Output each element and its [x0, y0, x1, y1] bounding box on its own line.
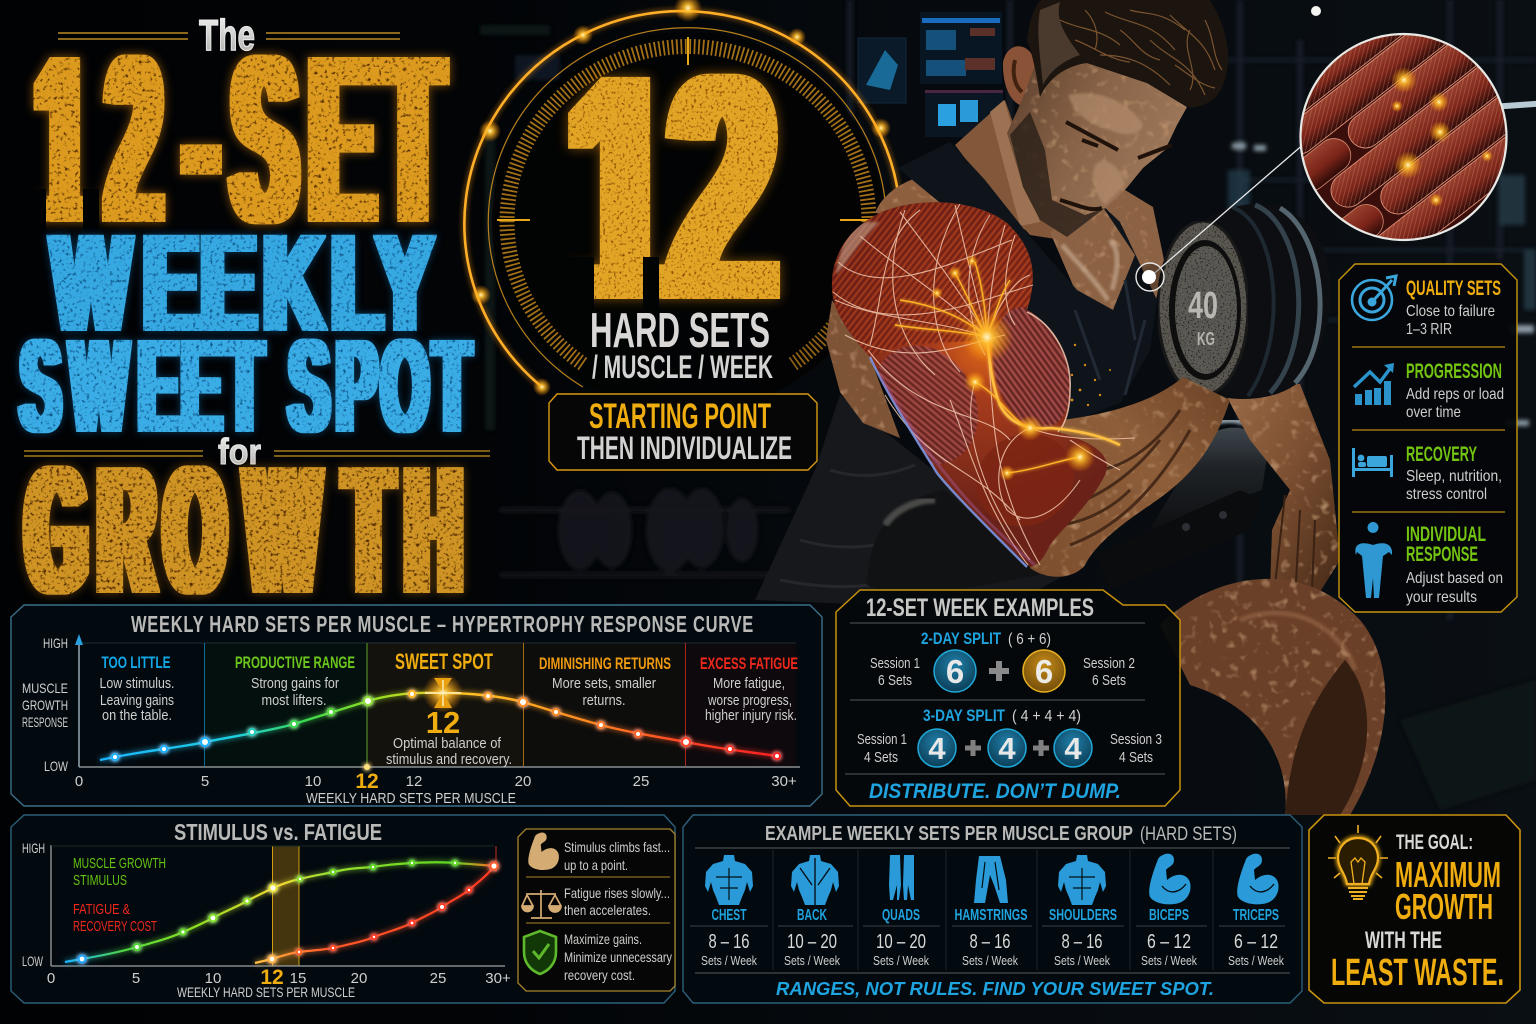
head, face and hair: [1003, 0, 1228, 237]
triceps: 6 – 12: [1234, 931, 1278, 953]
excess fatigue: worse progress,: [707, 692, 792, 709]
back: Sets / Week: [784, 953, 840, 968]
chest: 8 – 16: [708, 931, 750, 953]
icon: light bulb: [1328, 825, 1388, 899]
chest: Sets / Week: [701, 953, 757, 968]
2-day split: 6: [946, 653, 964, 690]
3-day split: 3-DAY SPLIT: [923, 706, 1005, 725]
stimulus vs fatigue chart: FATIGUE &: [73, 901, 130, 918]
starting point callout: [549, 394, 817, 470]
stimulus note: Stimulus climbs fast...: [564, 839, 670, 855]
2-day split: 2-DAY SPLIT: [921, 629, 1001, 648]
stimulus vs fatigue chart: STIMULUS: [73, 872, 127, 889]
starting point callout: THEN INDIVIDUALIZE: [577, 430, 792, 466]
individual response: INDIVIDUAL: [1406, 523, 1486, 546]
starting point callout: STARTING POINT: [589, 397, 771, 436]
productive range: most lifters.: [262, 692, 326, 709]
quads: [873, 855, 929, 968]
sweet spot: 12: [426, 705, 460, 740]
too little: TOO LITTLE: [102, 653, 170, 672]
shoulders: [1049, 855, 1117, 968]
individual response: RESPONSE: [1406, 543, 1478, 566]
3-day split: 4 Sets: [864, 749, 898, 766]
biceps: 6 – 12: [1147, 931, 1191, 953]
3-day split: [857, 706, 1162, 767]
panel: hypertrophy response curve: [11, 605, 822, 807]
biceps: BICEPS: [1149, 907, 1189, 924]
sweet spot: Optimal balance of: [393, 735, 502, 752]
back: [784, 855, 840, 968]
recovery: Sleep, nutrition,: [1406, 468, 1502, 485]
chart title: WEEKLY HARD SETS PER MUSCLE – HYPERTROPHY RESPONSE CURVE: [131, 611, 754, 637]
axis labels: HIGH: [43, 635, 68, 651]
axis labels: RESPONSE: [22, 714, 68, 730]
goal text: [1331, 831, 1504, 994]
maximize note: Minimize unnecessary: [564, 949, 672, 965]
recovery: RECOVERY: [1406, 443, 1477, 466]
axis labels: 30+: [771, 773, 797, 790]
biceps: [1141, 854, 1197, 968]
shoulders: Sets / Week: [1054, 953, 1110, 968]
2-day split: Session 2: [1083, 655, 1135, 672]
progression: over time: [1406, 404, 1461, 421]
thigh and knee: [1160, 579, 1385, 815]
response curve chart: [22, 634, 800, 807]
panel: the goal: [1309, 815, 1520, 1003]
excess fatigue: higher injury risk.: [705, 707, 797, 724]
title: The 12-Set Weekly Sweet Spot for Growth: 12-SET: [36, 8, 442, 272]
triceps: [1228, 854, 1284, 968]
hamstrings: Sets / Week: [962, 953, 1018, 968]
excess fatigue: More fatigue,: [713, 675, 785, 692]
too little: Leaving gains: [100, 692, 174, 709]
2-day split: 6 Sets: [878, 672, 912, 689]
fatigue note: Fatigue rises slowly...: [564, 885, 670, 901]
back: 10 – 20: [787, 931, 837, 953]
ranges tagline: RANGES, NOT RULES. FIND YOUR SWEET SPOT.: [776, 979, 1214, 999]
2-day split: ( 6 + 6): [1008, 631, 1051, 648]
3-day split: 4: [1064, 731, 1082, 766]
shoulders: 8 – 16: [1062, 931, 1102, 953]
productive range: [235, 653, 355, 709]
excess fatigue: [700, 654, 798, 724]
maximize note: recovery cost.: [564, 967, 635, 983]
axis labels: 25: [633, 773, 649, 790]
table heading: (HARD SETS): [1140, 824, 1237, 845]
title: The 12-Set Weekly Sweet Spot for Growth: [20, 8, 490, 631]
fatigue note: [564, 885, 670, 918]
title: The 12-Set Weekly Sweet Spot for Growth: WEEKLY: [52, 206, 432, 359]
biceps: Sets / Week: [1141, 953, 1197, 968]
axis labels: [22, 635, 797, 807]
stimulus vs fatigue chart: 12: [260, 966, 284, 989]
40 kg dumbbell: [1158, 204, 1331, 399]
stimulus vs fatigue chart: 0: [47, 970, 55, 987]
panel: stimulus vs fatigue: [11, 815, 675, 1003]
individual response: your results: [1406, 589, 1477, 606]
hamstrings: [954, 856, 1028, 968]
panel: 12-set week examples: [836, 590, 1180, 806]
quads: QUADS: [882, 907, 920, 924]
back: BACK: [797, 907, 827, 924]
axis labels: MUSCLE: [22, 680, 68, 696]
2-day split: 6 Sets: [1092, 672, 1126, 689]
progression: Add reps or load: [1406, 386, 1504, 403]
shoulders: SHOULDERS: [1049, 907, 1117, 924]
stimulus vs fatigue chart: 25: [430, 970, 446, 987]
title: The 12-Set Weekly Sweet Spot for Growth: SWEET SPOT: [20, 313, 470, 459]
axis labels: 12: [355, 770, 379, 793]
productive range: PRODUCTIVE RANGE: [235, 653, 355, 672]
goal text: THE GOAL:: [1396, 831, 1473, 854]
hero illustration: athlete curling a 40 kg dumbbell: [755, 0, 1536, 815]
40 kg dumbbell: 40: [1188, 285, 1218, 327]
axis labels: 12: [406, 773, 422, 790]
big 12 hard sets badge: [548, 66, 818, 471]
2-day split: 6: [1035, 653, 1053, 690]
progression: [1354, 360, 1504, 421]
diminishing returns: DIMINISHING RETURNS: [539, 654, 671, 673]
stimulus note: [564, 839, 670, 873]
quads: 10 – 20: [876, 931, 926, 953]
stimulus vs fatigue chart: MUSCLE GROWTH: [73, 855, 166, 872]
stimulus vs fatigue chart: [22, 840, 511, 1000]
quality sets: 1–3 RIR: [1406, 321, 1452, 338]
stimulus note: up to a point.: [564, 857, 628, 873]
axis labels: 5: [201, 773, 209, 790]
stimulus vs fatigue chart: 5: [132, 970, 140, 987]
3-day split: 4 Sets: [1119, 749, 1153, 766]
big 12 hard sets badge: 12: [567, 8, 776, 366]
stimulus vs fatigue chart: 20: [351, 970, 367, 987]
3-day split: ( 4 + 4 + 4): [1012, 708, 1081, 725]
excess fatigue: EXCESS FATIGUE: [700, 654, 798, 673]
far arm and hand: [1222, 384, 1340, 607]
icon: balance scale: [522, 890, 561, 918]
sweet spot marker: [423, 673, 463, 713]
table heading: EXAMPLE WEEKLY SETS PER MUSCLE GROUP: [765, 823, 1133, 845]
too little: Low stimulus.: [100, 675, 174, 692]
tricep skin: [826, 300, 900, 438]
shoulder, neck, chest and black tank: [875, 100, 1164, 425]
recovery: stress control: [1406, 486, 1487, 503]
axis labels: LOW: [44, 758, 69, 774]
hamstrings: HAMSTRINGS: [954, 907, 1028, 924]
gold dial ring around the big 12: [464, 0, 900, 412]
triceps: Sets / Week: [1228, 953, 1284, 968]
stimulus vs fatigue chart: 10: [205, 970, 221, 987]
stimulus vs fatigue chart: WEEKLY HARD SETS PER MUSCLE: [177, 984, 355, 1000]
axis labels: GROWTH: [22, 697, 68, 713]
big 12 hard sets badge: HARD SETS: [590, 304, 770, 358]
recovery: [1352, 443, 1502, 503]
zoom callout: glowing muscle fibres: [1136, 0, 1536, 291]
sweet spot: SWEET SPOT: [395, 649, 493, 674]
panel: example sets per muscle group: [683, 815, 1302, 1003]
40 kg dumbbell: KG: [1197, 329, 1215, 349]
too little: [100, 653, 174, 724]
stimulus vs fatigue chart: HIGH: [22, 840, 45, 856]
distribute tagline: DISTRIBUTE. DON’T DUMP.: [869, 780, 1121, 803]
sweet spot: [386, 649, 512, 768]
stimulus vs fatigue chart: LOW: [22, 953, 44, 969]
stimulus vs fatigue chart: RECOVERY COST: [73, 918, 157, 935]
maximize note: Maximize gains.: [564, 931, 642, 947]
quads: Sets / Week: [873, 953, 929, 968]
triceps: TRICEPS: [1233, 907, 1279, 924]
maximize note: [564, 931, 672, 983]
quality sets: [1352, 276, 1501, 338]
individual response: [1355, 522, 1503, 606]
axis labels: 20: [515, 773, 531, 790]
3-day split: 4: [928, 731, 946, 766]
productive range: Strong gains for: [251, 675, 339, 692]
axis labels: 10: [305, 773, 321, 790]
chest: CHEST: [712, 907, 747, 924]
fatigue note: then accelerates.: [564, 902, 651, 918]
title: The 12-Set Weekly Sweet Spot for Growth: for: [218, 431, 261, 472]
individual response: Adjust based on: [1406, 570, 1503, 587]
shirt, bench and seat: [755, 395, 1268, 610]
icon: green shield check: [524, 931, 556, 974]
diminishing returns: [539, 654, 671, 709]
chest: [701, 855, 757, 968]
stimulus vs fatigue chart: 30+: [485, 970, 511, 987]
2-day split: [870, 629, 1135, 692]
stimulus vs fatigue chart: 15: [290, 970, 306, 987]
panel: key factors: [1339, 264, 1517, 612]
axis labels: WEEKLY HARD SETS PER MUSCLE: [306, 790, 516, 807]
diminishing returns: returns.: [582, 692, 626, 709]
icon: flexed arm: [528, 832, 559, 870]
panel: 12-set week examples: 12-SET WEEK EXAMPLES: [866, 594, 1094, 622]
title: The 12-Set Weekly Sweet Spot for Growth: The: [199, 11, 255, 60]
3-day split: 4: [998, 731, 1016, 766]
hamstrings: 8 – 16: [970, 931, 1010, 953]
glowing upper-arm muscle map: [832, 202, 1135, 567]
quality sets: Close to failure: [1406, 303, 1495, 320]
axis labels: 0: [75, 773, 83, 790]
3-day split: Session 3: [1110, 731, 1162, 748]
title: The 12-Set Weekly Sweet Spot for Growth: GROWTH: [27, 430, 461, 631]
sweet spot: stimulus and recovery.: [386, 751, 512, 768]
2-day split: Session 1: [870, 655, 920, 672]
goal text: WITH THE: [1365, 927, 1442, 954]
diminishing returns: More sets, smaller: [552, 675, 656, 692]
too little: on the table.: [102, 707, 172, 724]
3-day split: Session 1: [857, 731, 907, 748]
takeaways sub-panel: [518, 829, 675, 991]
stimulus vs fatigue title: STIMULUS vs. FATIGUE: [174, 819, 382, 845]
forearm: [1030, 377, 1230, 577]
big 12 hard sets badge: / MUSCLE / WEEK: [592, 349, 773, 385]
